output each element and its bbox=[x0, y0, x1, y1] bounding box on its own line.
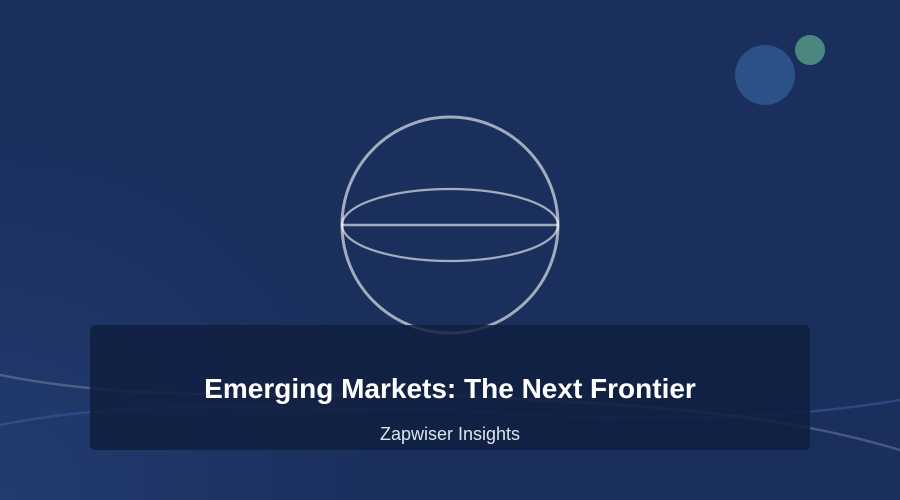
decorative wave lines bbox=[0, 375, 900, 450]
subtitle: Zapwiser Insights bbox=[380, 424, 520, 444]
icon: globe bbox=[342, 117, 558, 333]
title: Emerging Markets: The Next Frontier bbox=[204, 373, 696, 404]
panel: title banner bbox=[90, 325, 810, 450]
icon: decorative blue circle bbox=[735, 45, 795, 105]
icon: decorative green circle bbox=[795, 35, 825, 65]
